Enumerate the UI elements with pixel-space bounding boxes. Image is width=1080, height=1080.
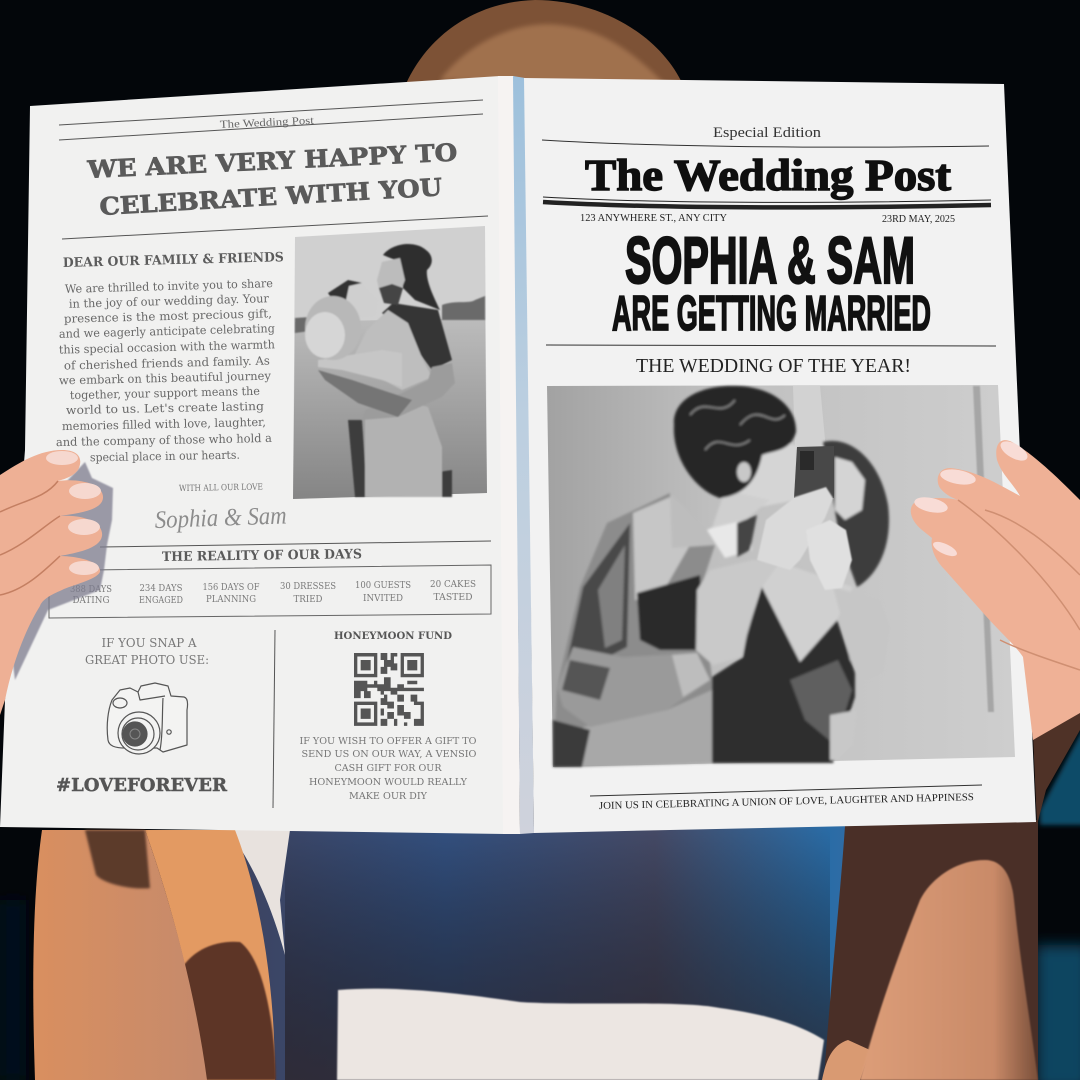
honeymoon text bbox=[300, 736, 477, 802]
stat: cakes tasted bbox=[430, 579, 476, 603]
honeymoon text: MAKE OUR DIY bbox=[349, 791, 428, 802]
woman chest bbox=[762, 560, 853, 662]
man tee bbox=[382, 303, 452, 370]
man arm bbox=[362, 363, 455, 420]
man neck and face bbox=[732, 440, 797, 510]
stat: days dating: DATING bbox=[72, 595, 110, 606]
stat: dresses tried: TRIED bbox=[294, 594, 322, 605]
jacket chest shadow bbox=[637, 575, 705, 650]
address and date: 123 ANYWHERE ST., ANY CITY bbox=[580, 213, 727, 224]
stat: cakes tasted: TASTED bbox=[434, 592, 472, 603]
woman face bbox=[835, 457, 865, 520]
wrist shadow bbox=[1033, 708, 1080, 825]
stat: dresses tried bbox=[280, 581, 336, 605]
stat: guests invited: 100 GUESTS bbox=[355, 580, 411, 591]
man sleeve bbox=[557, 647, 710, 727]
dress bbox=[712, 587, 855, 763]
man hand on waist bbox=[830, 710, 857, 760]
tattooed arm bbox=[318, 370, 412, 417]
body letter: of cherished friends and family. As bbox=[64, 353, 270, 373]
masthead rules bbox=[59, 100, 483, 140]
sign-off: WITH ALL OUR LOVE bbox=[179, 483, 263, 494]
panel: right page bbox=[524, 78, 1036, 833]
stat: guests invited: INVITED bbox=[363, 593, 403, 604]
fingernails bbox=[913, 437, 1030, 559]
shirt bbox=[228, 824, 936, 1080]
stat: days engaged bbox=[139, 583, 183, 606]
hand: left bbox=[0, 450, 113, 715]
icon: camera bbox=[107, 683, 188, 754]
sign-off bbox=[154, 483, 287, 534]
straw hat bbox=[305, 296, 361, 360]
arm: left bbox=[33, 830, 276, 1080]
body letter: presence is the most precious gift, bbox=[64, 306, 272, 326]
body letter: world to us. Let's create lasting bbox=[66, 399, 265, 417]
body letter: in the joy of our wedding day. Your bbox=[69, 291, 270, 311]
stat: days engaged: ENGAGED bbox=[139, 595, 183, 606]
jacket sleeve shade bbox=[563, 523, 630, 680]
masthead double rule bbox=[543, 197, 991, 207]
hashtag: #LOVEFOREVER bbox=[56, 776, 227, 796]
door panel bbox=[793, 386, 826, 450]
heading: happy to celebrate: WE ARE VERY HAPPY TO bbox=[86, 138, 458, 184]
subheading: reality of our days: THE REALITY OF OUR DAYS bbox=[162, 547, 362, 565]
woman near arm bbox=[696, 560, 780, 665]
photo prompt bbox=[85, 636, 209, 667]
body letter: and the company of those who hold a bbox=[56, 431, 272, 449]
rules: reality section bbox=[100, 541, 491, 547]
photo: couple selfie bbox=[547, 385, 1015, 767]
man trousers bbox=[348, 420, 452, 497]
signature: Sophia & Sam bbox=[154, 502, 287, 534]
heading: happy to celebrate: CELEBRATE WITH YOU bbox=[99, 172, 443, 221]
stat: days dating bbox=[70, 584, 112, 606]
body letter: special place in our hearts. bbox=[90, 448, 240, 464]
man curly hair bbox=[674, 386, 796, 498]
body letter: together, your support means the bbox=[70, 384, 260, 402]
stat: days dating: 388 DAYS bbox=[70, 584, 112, 595]
stats box bbox=[49, 565, 491, 618]
man beard bbox=[379, 284, 403, 305]
heading: honeymoon fund: HONEYMOON FUND bbox=[334, 630, 452, 642]
stat: guests invited bbox=[355, 580, 411, 604]
man hair bbox=[383, 244, 440, 310]
shirt: lit lower band bbox=[337, 989, 824, 1080]
photo prompt: GREAT PHOTO USE: bbox=[85, 653, 209, 667]
arm shadow bbox=[178, 942, 276, 1080]
body letter bbox=[56, 276, 276, 464]
tree line bbox=[295, 296, 485, 333]
photo prompt: IF YOU SNAP A bbox=[102, 636, 197, 650]
hair bbox=[405, 0, 683, 86]
woman hair and face bbox=[328, 280, 362, 320]
honeymoon text: IF YOU WISH TO OFFER A GIFT TO bbox=[300, 736, 477, 747]
address and date bbox=[580, 213, 955, 225]
body letter: We are thrilled to invite you to share bbox=[65, 276, 273, 296]
divider bbox=[273, 630, 275, 808]
body letter: and we eagerly anticipate celebrating bbox=[59, 321, 276, 341]
stat: cakes tasted: 20 CAKES bbox=[430, 579, 476, 590]
hand shadow bbox=[10, 462, 113, 680]
hand: right bbox=[911, 437, 1080, 825]
stat: days of planning bbox=[202, 582, 260, 605]
arm: right bbox=[822, 820, 1038, 1080]
qr code bbox=[354, 653, 424, 726]
kicker: the wedding post: The Wedding Post bbox=[220, 115, 314, 131]
woman top bbox=[352, 310, 432, 390]
shirt: lit side strip bbox=[228, 830, 290, 955]
man face bbox=[377, 258, 405, 298]
jacket collar bbox=[670, 493, 715, 548]
photo: couple in field bbox=[293, 226, 487, 499]
woman arm bbox=[318, 350, 402, 387]
book spine bbox=[498, 76, 534, 834]
edition label: Especial Edition bbox=[713, 125, 822, 141]
hands on phone bbox=[757, 487, 833, 570]
woman hair bbox=[823, 441, 889, 587]
subheading: dear family and friends: DEAR OUR FAMILY & FRIENDS bbox=[63, 250, 284, 271]
honeymoon text: SEND US ON OUR WAY, A VENSIO bbox=[302, 749, 477, 760]
stat: days engaged: 234 DAYS bbox=[140, 583, 182, 594]
fingernails bbox=[46, 451, 101, 575]
stat: days of planning: PLANNING bbox=[206, 594, 256, 605]
honeymoon text: HONEYMOON WOULD REALLY bbox=[309, 777, 468, 788]
tee bbox=[707, 510, 752, 558]
body letter: memories filled with love, laughter, bbox=[62, 415, 266, 433]
masthead: the wedding post: The Wedding Post bbox=[585, 151, 951, 200]
jacket lower bbox=[580, 690, 712, 767]
phone bbox=[794, 446, 834, 498]
tagline: JOIN US IN CELEBRATING A UNION OF LOVE, LAUGHTER AND HAPPINESS bbox=[599, 792, 974, 812]
body letter: we embark on this beautiful journey bbox=[59, 369, 272, 387]
woman far arm bbox=[833, 587, 890, 680]
stat: dresses tried: 30 DRESSES bbox=[280, 581, 336, 592]
subheadline: THE WEDDING OF THE YEAR! bbox=[636, 355, 911, 377]
panel: left page bbox=[0, 76, 505, 834]
woman skirt bbox=[365, 400, 442, 497]
heading: happy to celebrate bbox=[86, 138, 458, 221]
man jacket bbox=[553, 493, 715, 767]
honeymoon text: CASH GIFT FOR OUR bbox=[334, 763, 442, 774]
address and date: 23RD MAY, 2025 bbox=[882, 214, 955, 225]
body letter: this special occasion with the warmth bbox=[59, 337, 276, 357]
stat: days of planning: 156 DAYS OF bbox=[202, 582, 260, 593]
